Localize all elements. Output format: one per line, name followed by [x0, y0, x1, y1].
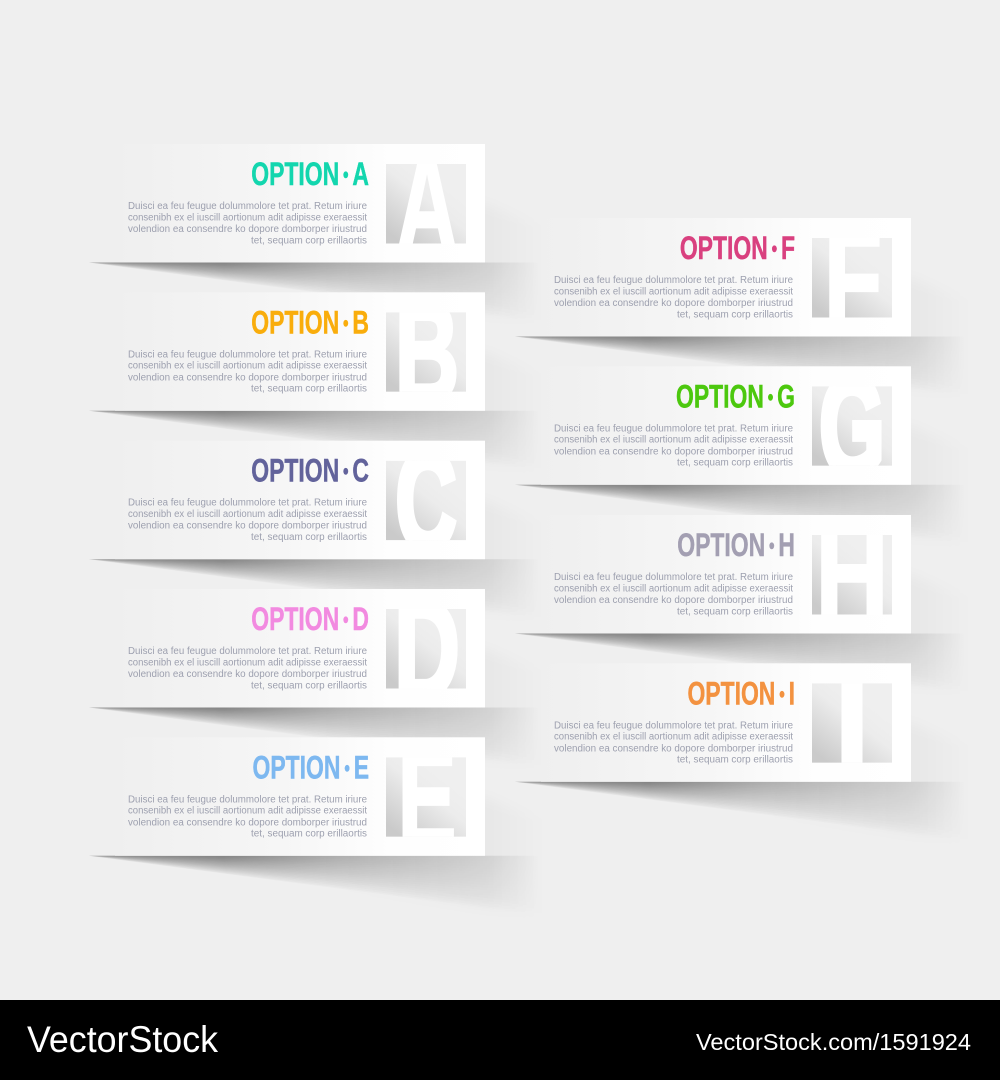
shadow: option B [88, 341, 545, 470]
heading: option I: OPTION [687, 676, 775, 711]
text block: option F [554, 275, 794, 320]
heading: option E: • [344, 757, 350, 781]
text block: option H: consenibh ex el iuscill aortionum adit adipisse exeraessit [554, 583, 793, 594]
card: option H [541, 515, 911, 634]
icon: letter B cut-out: B [395, 274, 459, 430]
text block: option D [128, 646, 368, 691]
text block: option E: tet, sequam corp erillaortis [251, 829, 367, 840]
icon: letter G cut-out [812, 386, 892, 466]
watermark url: VectorStock.com/1591924 [696, 1029, 971, 1055]
watermark logo: VectorStock [27, 1019, 218, 1060]
icon: letter B cut-out [386, 312, 466, 392]
heading: option G: OPTION [676, 379, 764, 414]
text block: option F: tet, sequam corp erillaortis [677, 309, 793, 320]
heading: option H: OPTION [677, 527, 765, 563]
text block: option B: consenibh ex el iuscill aortionum adit adipisse exeraessit [128, 361, 367, 372]
panel: option A [90, 144, 526, 311]
icon: letter I cut-out: I [834, 644, 870, 801]
text block: option G: tet, sequam corp erillaortis [677, 458, 793, 469]
shadow: option D [88, 638, 545, 766]
card: option B [115, 292, 485, 411]
shadow: option A [88, 192, 545, 322]
heading: option I: • [779, 683, 785, 707]
text block: option B: volendion ea consendre ko dopore domborper iriustrud [128, 372, 367, 383]
card: option A [115, 144, 485, 262]
icon: letter A cut-out: A [396, 126, 458, 282]
text block: option D: Duisci ea feu feugue dolummolore tet prat. Retum iriure [128, 646, 368, 657]
text block: option I: tet, sequam corp erillaortis [677, 755, 793, 766]
shadow: option F [514, 266, 971, 396]
heading: option D: • [343, 609, 349, 633]
text block: option F: consenibh ex el iuscill aortionum adit adipisse exeraessit [554, 286, 793, 297]
card: option D [115, 589, 485, 708]
text block: option C: Duisci ea feu feugue dolummolore tet prat. Retum iriure [128, 498, 368, 509]
heading: option A: • [343, 164, 349, 188]
panel: option C [90, 440, 526, 608]
icon: letter F cut-out: F [824, 201, 882, 356]
icon: letter G cut-out: G [819, 348, 885, 505]
heading: option C: • [343, 460, 349, 484]
panel: option F [516, 218, 952, 385]
text block: option D: volendion ea consendre ko dopore domborper iriustrud [128, 669, 367, 680]
text block: option H: volendion ea consendre ko dopore domborper iriustrud [554, 595, 793, 606]
watermark bar [0, 1000, 1000, 1080]
text block: option A: Duisci ea feu feugue dolummolore tet prat. Retum iriure [128, 201, 368, 212]
text block: option B [128, 349, 368, 395]
icon: letter A cut-out [386, 164, 466, 244]
icon: letter C cut-out: C [396, 423, 456, 579]
icon: letter I cut-out [812, 684, 892, 763]
text block: option A [128, 201, 368, 246]
heading: option D: D [352, 601, 369, 637]
panel: option B [90, 292, 526, 459]
text block: option I: consenibh ex el iuscill aortionum adit adipisse exeraessit [554, 732, 793, 743]
heading: option D: OPTION [251, 601, 339, 637]
heading: option F: • [772, 238, 777, 262]
heading: option I: I [789, 676, 795, 711]
text block: option G: Duisci ea feu feugue dolummolore tet prat. Retum iriure [554, 423, 794, 434]
text block: option B: Duisci ea feu feugue dolummolore tet prat. Retum iriure [128, 349, 368, 360]
text block: option A: tet, sequam corp erillaortis [251, 235, 367, 246]
heading: option E: OPTION [253, 750, 340, 785]
text block: option H [554, 572, 794, 617]
card: option C [115, 441, 485, 559]
panel: option I [516, 663, 952, 830]
text block: option C: volendion ea consendre ko dopore domborper iriustrud [128, 521, 367, 532]
panel: option G [516, 366, 952, 533]
text block: option E: Duisci ea feu feugue dolummolore tet prat. Retum iriure [128, 794, 368, 805]
icon: letter D cut-out [386, 609, 466, 688]
heading: option B: B [352, 305, 369, 340]
text block: option G: consenibh ex el iuscill aortionum adit adipisse exeraessit [554, 435, 793, 446]
heading: option G: G [777, 379, 795, 414]
card: option E [115, 737, 485, 856]
text block: option C [128, 498, 368, 543]
icon: letter C cut-out [386, 461, 466, 540]
shadow: option C [88, 489, 545, 618]
text block: option F: volendion ea consendre ko dopore domborper iriustrud [554, 298, 793, 309]
text block: option B: tet, sequam corp erillaortis [251, 384, 367, 395]
shadow: option G [514, 415, 971, 544]
card: option G [541, 366, 911, 485]
panel: option H [516, 515, 952, 682]
shadow: option H [514, 564, 971, 692]
icon: letter H cut-out: H [815, 496, 889, 653]
text block: option G: volendion ea consendre ko dopore domborper iriustrud [554, 446, 793, 457]
text block: option C: tet, sequam corp erillaortis [251, 532, 367, 543]
text block: option A: volendion ea consendre ko dopore domborper iriustrud [128, 224, 367, 235]
heading: option E: E [354, 750, 369, 785]
text block: option D: tet, sequam corp erillaortis [251, 680, 367, 691]
heading: option B: OPTION [251, 305, 339, 340]
text block: option I [554, 720, 794, 766]
icon: letter D cut-out: D [394, 571, 460, 728]
heading: option B: • [343, 312, 349, 336]
icon: letter F cut-out [812, 238, 892, 318]
heading: option F: F [781, 230, 795, 266]
text block: option E: consenibh ex el iuscill aortionum adit adipisse exeraessit [128, 806, 367, 817]
text block: option H: Duisci ea feu feugue dolummolore tet prat. Retum iriure [554, 572, 794, 583]
heading: option H: • [769, 535, 775, 559]
text block: option I: Duisci ea feu feugue dolummolore tet prat. Retum iriure [554, 720, 794, 731]
text block: option D: consenibh ex el iuscill aortionum adit adipisse exeraessit [128, 657, 367, 668]
text block: option G [554, 423, 794, 469]
shadow: option E [88, 786, 545, 915]
text block: option H: tet, sequam corp erillaortis [677, 606, 793, 617]
card: option F [541, 218, 911, 336]
text block: option F: Duisci ea feu feugue dolummolore tet prat. Retum iriure [554, 275, 794, 286]
text block: option A: consenibh ex el iuscill aortionum adit adipisse exeraessit [128, 212, 367, 223]
heading: option C: OPTION [251, 453, 339, 489]
icon: letter E cut-out: E [398, 718, 456, 875]
text block: option E [128, 794, 368, 840]
heading: option A: A [352, 156, 369, 192]
text block: option C: consenibh ex el iuscill aortionum adit adipisse exeraessit [128, 509, 367, 520]
shadow: option I [514, 712, 971, 841]
text block: option E: volendion ea consendre ko dopore domborper iriustrud [128, 817, 367, 828]
panel: option D [90, 589, 526, 756]
panel: option E [90, 737, 526, 904]
heading: option A: OPTION [251, 156, 339, 192]
icon: letter E cut-out [386, 758, 466, 837]
heading: option F: OPTION [680, 230, 768, 266]
heading: option G: • [768, 386, 774, 410]
heading: option H: H [778, 527, 795, 563]
text block: option I: volendion ea consendre ko dopore domborper iriustrud [554, 743, 793, 754]
heading: option C: C [352, 453, 369, 489]
icon: letter H cut-out [812, 535, 892, 614]
card: option I [541, 663, 911, 782]
